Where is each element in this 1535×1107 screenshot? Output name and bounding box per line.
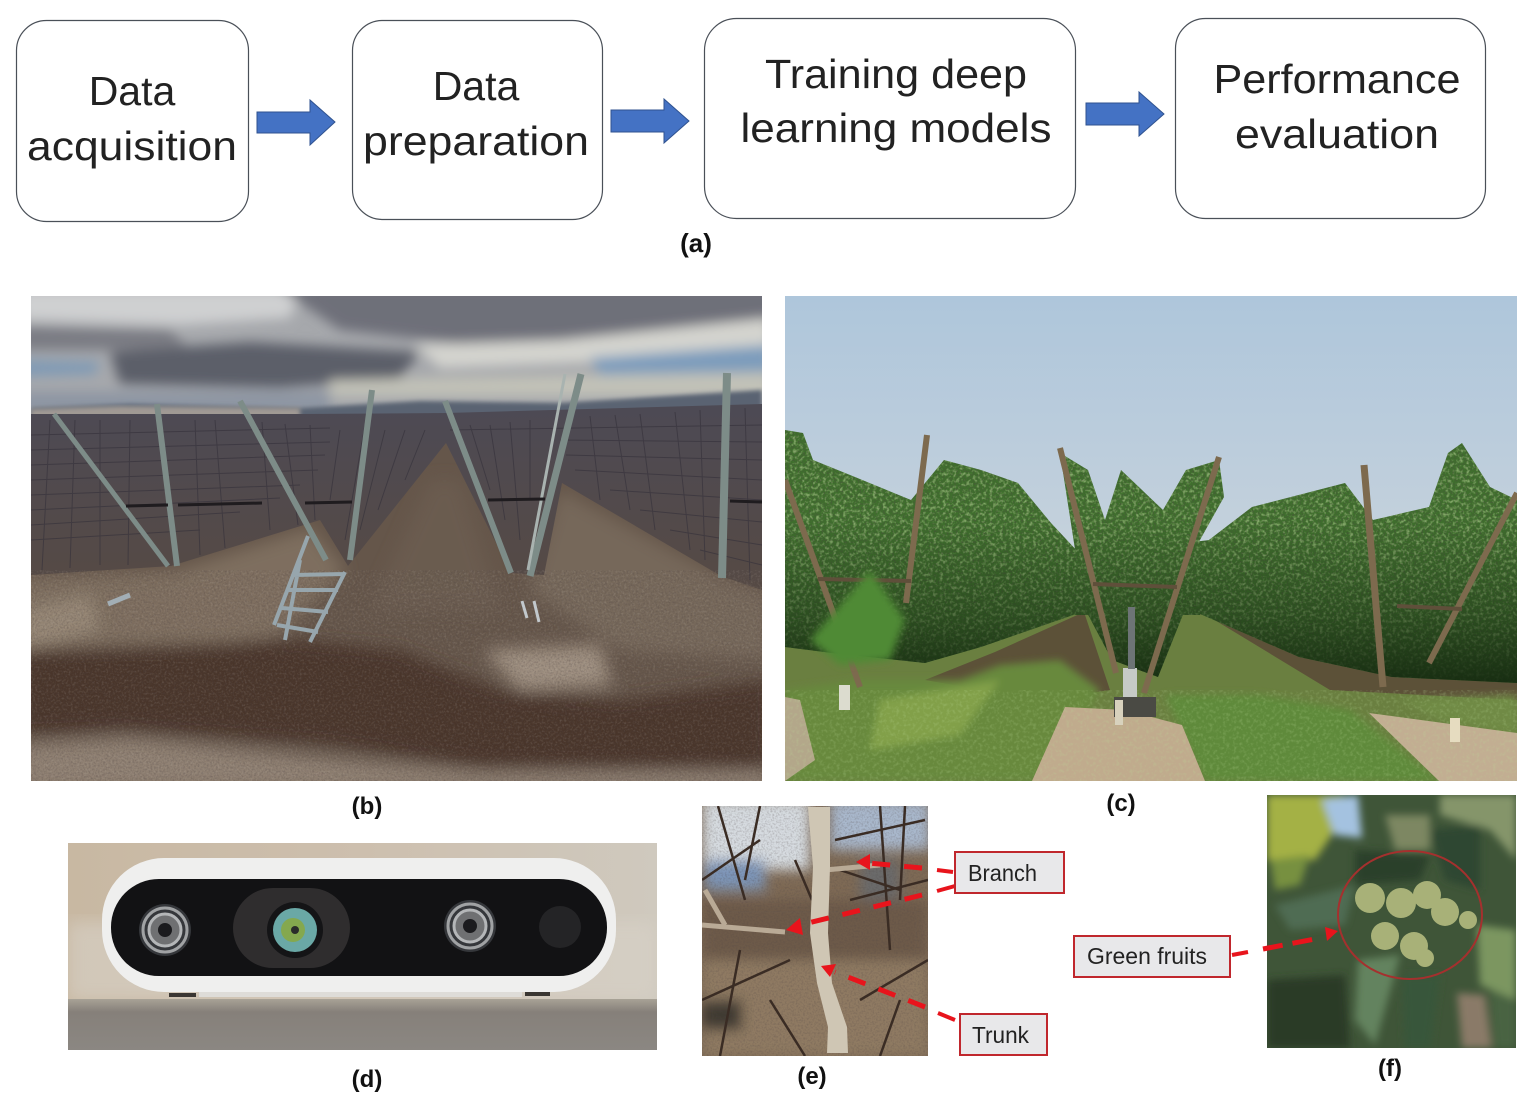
box: Data acquisition: Data — [89, 68, 175, 114]
caption (d): (d) — [352, 1066, 382, 1093]
box: Performance evaluation: evaluation — [1235, 111, 1439, 157]
arrow: training to evaluation — [1086, 92, 1164, 136]
box: Data acquisition: acquisition — [27, 123, 237, 169]
ladder — [274, 536, 345, 642]
box: Data preparation: preparation — [363, 118, 589, 164]
box: Training deep learning models: Training deep — [765, 51, 1027, 97]
arrow: Trunk — [821, 964, 955, 1020]
photo (c): leafy orchard rows — [785, 296, 1517, 781]
box: Performance evaluation — [1176, 18, 1486, 218]
soil texture — [31, 570, 762, 781]
tree rows — [31, 413, 446, 575]
caption (a): (a) — [680, 228, 712, 258]
posts — [785, 435, 1517, 693]
label: Trunk — [960, 1014, 1047, 1055]
box: Data preparation — [352, 20, 602, 220]
ground paths — [1200, 614, 1517, 700]
hedges — [785, 420, 1517, 690]
caption (b): (b) — [352, 793, 382, 820]
label: Branch — [955, 852, 1064, 893]
lenses — [233, 888, 350, 968]
arrow: Branch lower — [786, 886, 955, 935]
label: Green fruits — [1074, 936, 1230, 977]
soil — [31, 425, 762, 781]
irrigation riser — [1123, 668, 1137, 700]
photo (f): green pears — [1267, 795, 1516, 1048]
box: Data acquisition — [16, 20, 248, 222]
grass and dirt — [785, 660, 1517, 781]
box: Training deep learning models: learning models — [740, 105, 1052, 151]
box: Training deep learning models — [704, 18, 1076, 218]
arrow: Green fruits — [1232, 927, 1338, 955]
caption (f): (f) — [1378, 1055, 1402, 1082]
label: Green fruits: Green fruits — [1087, 943, 1207, 969]
posts — [54, 373, 727, 578]
caption (e): (e) — [797, 1063, 827, 1090]
young tree at left post — [810, 570, 905, 665]
label: Branch: Branch — [968, 860, 1037, 886]
arrow: Branch upper — [856, 854, 953, 872]
distant hills — [31, 388, 762, 414]
box: Data preparation: Data — [433, 63, 519, 109]
caption (c): (c) — [1106, 790, 1136, 817]
camera body — [102, 858, 616, 992]
photo (e): trunk and branches — [702, 800, 930, 1056]
arrow: preparation to training — [611, 99, 689, 143]
arrow: acquisition to preparation — [257, 100, 335, 145]
label: Trunk: Trunk — [972, 1022, 1029, 1048]
box: Performance evaluation: Performance — [1214, 56, 1460, 102]
pears — [1355, 881, 1477, 967]
photo (b): dormant orchard rows — [20, 285, 780, 790]
photo (d): depth camera — [68, 843, 657, 1050]
